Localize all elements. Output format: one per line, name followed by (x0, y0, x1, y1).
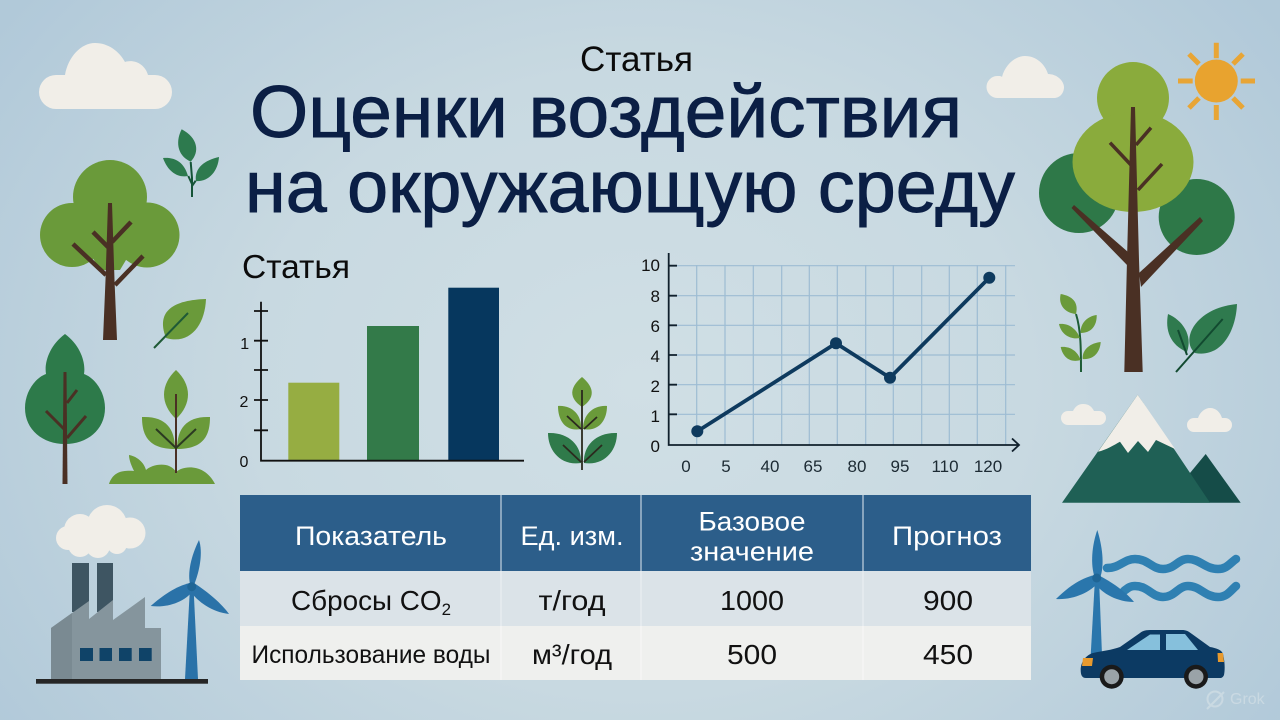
x axis labels: 120 (974, 457, 1002, 476)
y axis labels: 0 (651, 437, 660, 456)
x axis labels: 5 (721, 457, 731, 476)
x axis labels: 40 (761, 457, 779, 476)
icon: plant by bar chart (548, 377, 617, 470)
eyebrow label: Статья: Статья (580, 40, 693, 79)
title: на окружающую среду (245, 147, 1015, 228)
line chart (641, 253, 1019, 476)
axis labels: 2 (240, 394, 249, 411)
icon: plant with bush (109, 370, 215, 484)
icon: wind turbine left (151, 540, 229, 679)
table header: Базовое (698, 506, 806, 536)
table row: water: Использование воды (252, 641, 490, 669)
x axis labels: 80 (848, 457, 866, 476)
icon: sprig right (1059, 294, 1101, 372)
grid (668, 265, 1015, 445)
table header: Прогноз (892, 521, 1002, 551)
y axis labels: 1 (651, 407, 660, 426)
icon: two leaves right (1167, 304, 1237, 372)
y axis labels: 8 (651, 287, 660, 306)
bars (288, 288, 499, 460)
table row: water (240, 626, 1031, 680)
y axis labels (641, 256, 660, 456)
table header: Ед. изм. (520, 521, 624, 551)
icon: sprig top left (163, 129, 219, 197)
smoke cloud (56, 505, 146, 558)
table row: water: м³/год (532, 639, 612, 670)
y axis labels: 10 (641, 256, 660, 275)
table header: Показатель (295, 521, 447, 551)
icon: small clouds by mountain (1061, 404, 1232, 432)
bar chart (240, 248, 524, 471)
x axis labels (681, 457, 1002, 476)
icon: single leaf left (154, 299, 206, 348)
icon: water waves (1107, 559, 1236, 597)
table row: water: 450 (923, 639, 973, 670)
data line (691, 272, 995, 437)
icon: sun (1178, 43, 1255, 120)
x axis labels: 0 (681, 457, 691, 476)
table row: CO2: 1000 (720, 585, 784, 616)
axis labels: 0 (240, 454, 249, 471)
title: Оценки воздействия (250, 72, 962, 153)
x axis labels: 95 (891, 457, 909, 476)
icon: mountains (1062, 395, 1241, 503)
y axis labels: 4 (651, 347, 660, 366)
table row: CO2: Сбросы CO (291, 585, 442, 616)
y axis labels: 6 (651, 317, 660, 336)
watermark: Grok (1230, 691, 1266, 708)
table header: значение (690, 536, 814, 566)
icon: large cloud top left (39, 43, 172, 109)
icon: round tree left (40, 160, 180, 340)
table header (240, 495, 1031, 571)
table row: water: 500 (727, 639, 777, 670)
icon: large tree right (1039, 62, 1235, 372)
chart heading: Статья (242, 248, 350, 285)
table (240, 495, 1031, 680)
axes (254, 302, 524, 461)
table row: CO2 (240, 571, 1031, 626)
icon: car (1081, 630, 1225, 689)
icon: factory (36, 505, 208, 684)
x axis labels: 65 (804, 457, 822, 476)
icon: cloud top right (986, 56, 1064, 98)
axes with arrow (669, 253, 1019, 452)
x axis labels: 110 (931, 457, 959, 476)
table row: CO2: 2 (442, 600, 451, 619)
y axis labels: 2 (651, 377, 660, 396)
table row: CO2: т/год (538, 585, 606, 616)
axis labels: 1 (240, 336, 249, 353)
watermark (1207, 691, 1266, 709)
icon: wind turbine right (1056, 530, 1134, 655)
icon: small dark tree left (25, 334, 105, 484)
table row: CO2: 900 (923, 585, 973, 616)
axis labels (240, 336, 249, 471)
title (245, 72, 1015, 228)
